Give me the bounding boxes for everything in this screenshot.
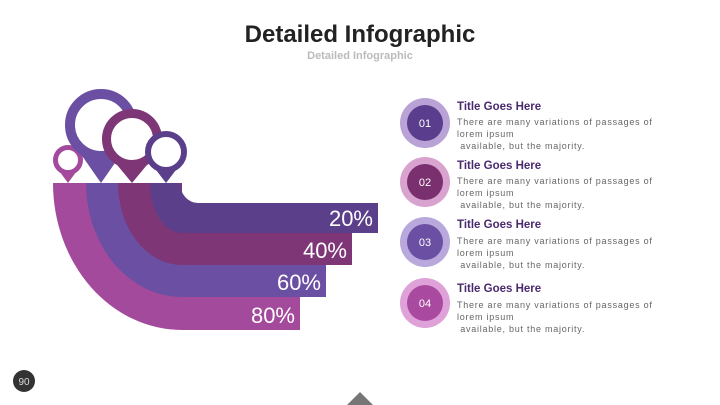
page number — [13, 370, 35, 392]
text: There are many variations of passages of — [457, 236, 653, 246]
text: Title Goes Here — [457, 101, 541, 113]
text: Title Goes Here — [457, 160, 541, 172]
badge 04 — [400, 278, 450, 328]
pin small pink — [56, 148, 80, 183]
pin dark — [148, 134, 184, 183]
text: available, but the majority. — [460, 324, 585, 334]
text: There are many variations of passages of — [457, 117, 653, 127]
title: Detailed Infographic — [245, 21, 475, 48]
item 04 — [457, 283, 653, 334]
bar 80% — [53, 183, 300, 330]
badge 01: 01 — [419, 118, 431, 130]
subtitle: Detailed Infographic — [307, 50, 413, 62]
text: There are many variations of passages of — [457, 300, 653, 310]
badge 02: 02 — [419, 177, 431, 189]
text: lorem ipsum — [457, 248, 514, 258]
text: Title Goes Here — [457, 219, 541, 231]
text: available, but the majority. — [460, 141, 585, 151]
item 03 — [457, 219, 653, 270]
bar 40%: 40% — [303, 238, 347, 263]
text: available, but the majority. — [460, 200, 585, 210]
badge 03 — [400, 217, 450, 267]
badge 02 — [400, 157, 450, 207]
pin plum — [106, 114, 158, 183]
bar 40% — [118, 183, 352, 265]
item 02 — [457, 160, 653, 210]
text: Title Goes Here — [457, 283, 541, 295]
bar 20%: 20% — [329, 206, 373, 231]
text: There are many variations of passages of — [457, 176, 653, 186]
badge 01 — [400, 98, 450, 148]
bar 60%: 60% — [277, 270, 321, 295]
text: lorem ipsum — [457, 188, 514, 198]
badge 03: 03 — [419, 237, 431, 249]
bar 80%: 80% — [251, 303, 295, 328]
pin big violet — [70, 94, 132, 183]
badge 04: 04 — [419, 298, 431, 310]
page number: 90 — [18, 377, 30, 388]
bar 20% — [150, 183, 378, 233]
text: available, but the majority. — [460, 260, 585, 270]
bar 60% — [86, 183, 326, 297]
text: lorem ipsum — [457, 129, 514, 139]
item 01 — [457, 101, 653, 151]
nav triangle — [347, 392, 373, 405]
text: lorem ipsum — [457, 312, 514, 322]
